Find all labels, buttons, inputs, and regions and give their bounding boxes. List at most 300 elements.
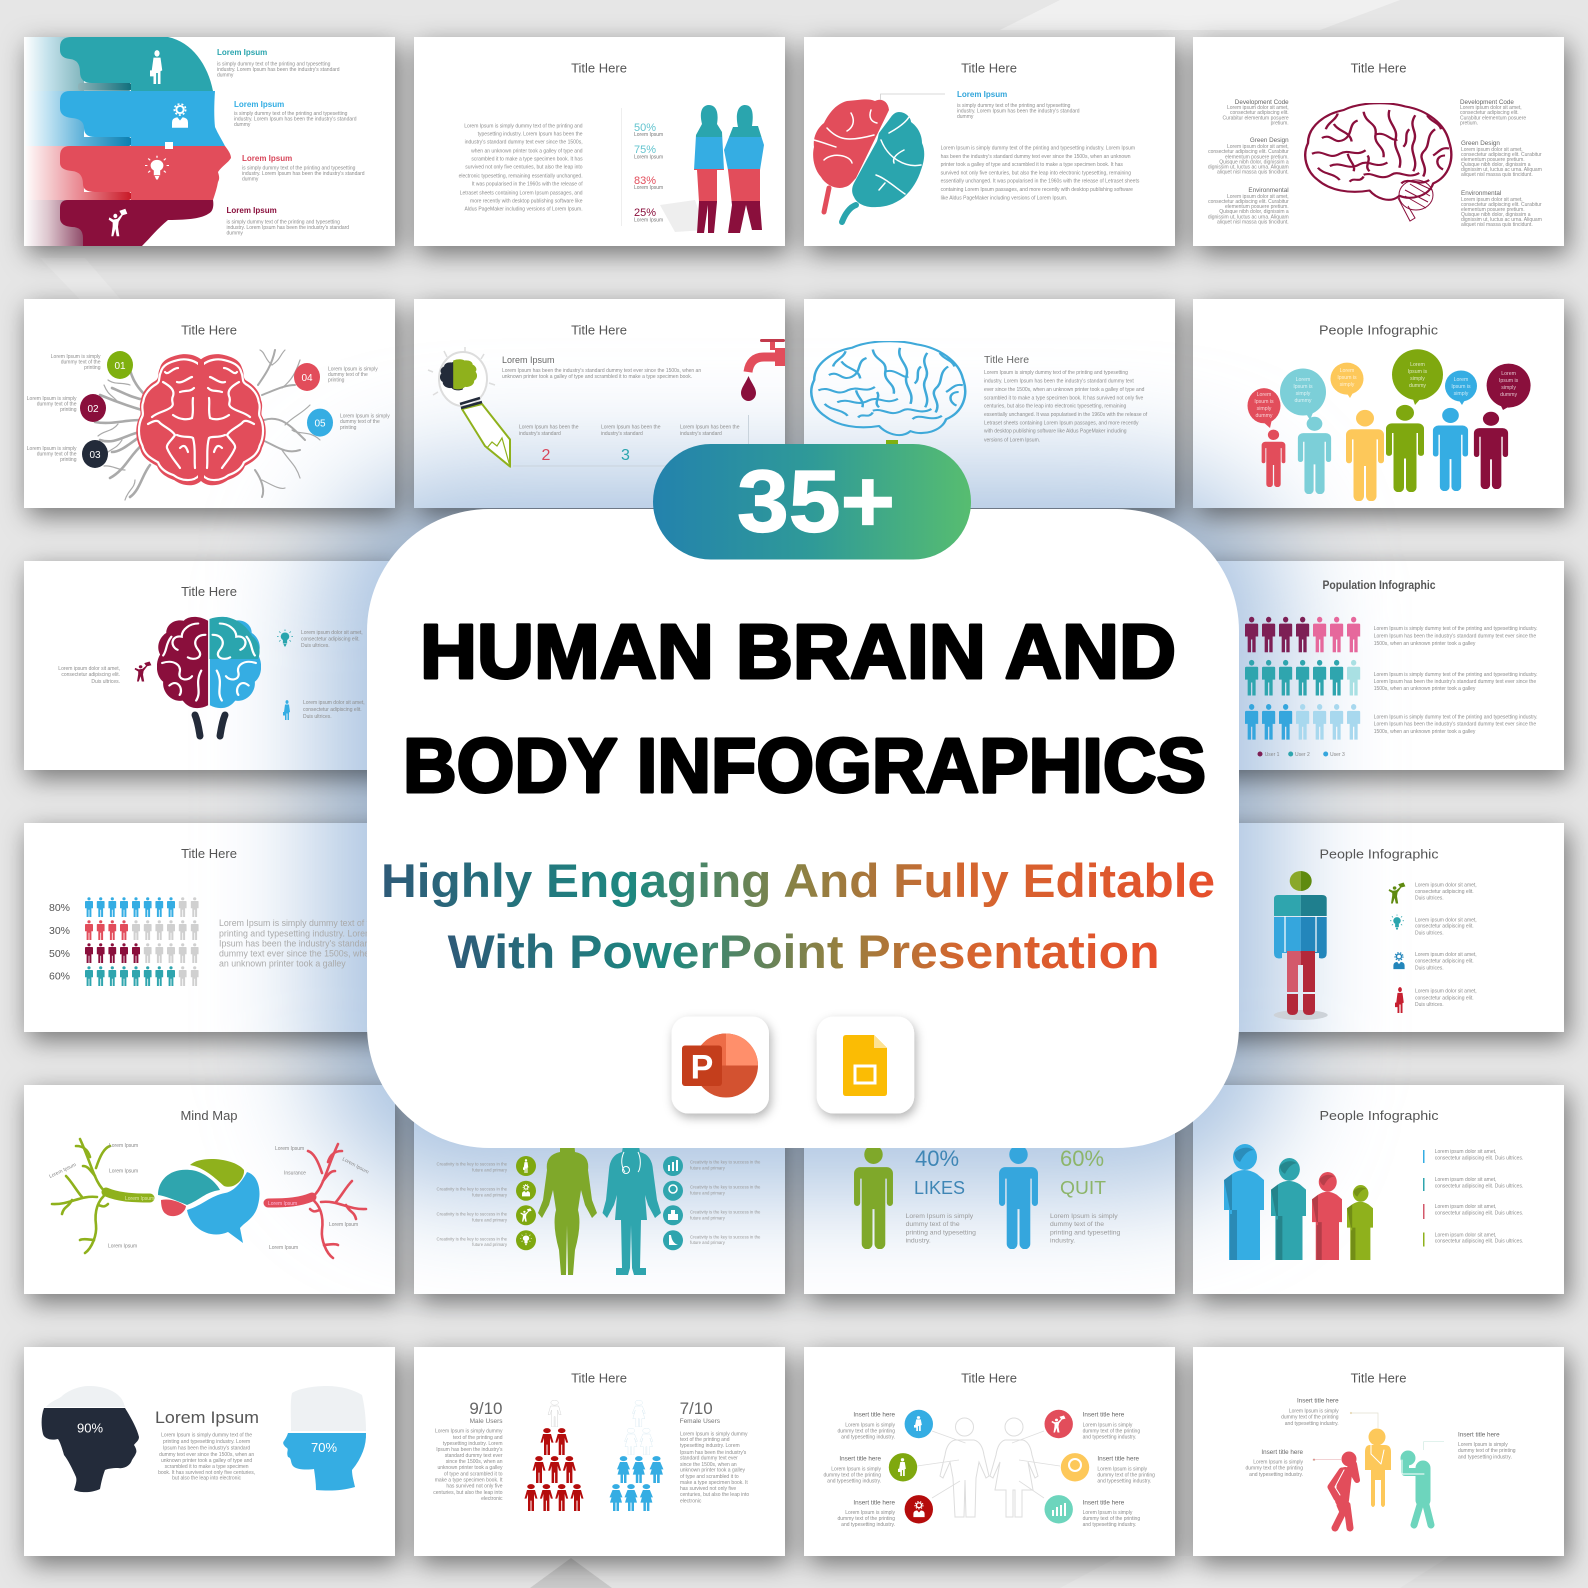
notes: Lorem Ipsum has been the industry's standard dummy text ever since the (1374, 679, 1536, 685)
pictogram grid (85, 897, 199, 986)
speech bubbles: dummy (1255, 413, 1273, 419)
title: Title Here (181, 322, 237, 338)
paragraph: industry's standard dummy text ever since the 1500s, (465, 140, 583, 146)
feature list: consectetur adipiscing elit. (1415, 924, 1474, 930)
paragraph: industry. Lorem Ipsum has been the industry's standard dummy text (984, 379, 1134, 385)
right notes: Lorem ipsum dolor sit amet, (301, 630, 363, 636)
brain outline (1305, 103, 1451, 221)
left labels: and typesetting industry. (841, 1522, 895, 1528)
feature list: Lorem ipsum dolor sit amet, (1415, 989, 1477, 995)
label texts: industry. Lorem Ipsum has been the industry's standard (226, 225, 349, 231)
label texts: Lorem Ipsum (217, 48, 267, 57)
notes: Lorem Ipsum is simply (1050, 1213, 1118, 1220)
labels: dummy text of the printing (1458, 1448, 1516, 1454)
icon: PowerPoint (672, 1016, 769, 1114)
paragraph: Lorem Ipsum is simply dummy text of the printing and typesetting (984, 370, 1128, 376)
feature list: Duis ultrices. (1415, 930, 1444, 936)
legend: User 2 (1295, 752, 1310, 758)
subtitle (381, 854, 1215, 978)
labels (27, 354, 390, 463)
columns: industry's standard (601, 431, 643, 437)
notes: printing and typesetting (906, 1230, 976, 1236)
speech bubbles: simply (1296, 391, 1311, 397)
stats: Lorem Ipsum (634, 132, 663, 138)
stat: likes: 40% (915, 1146, 959, 1171)
list: Lorem ipsum dolor sit amet, (1435, 1232, 1496, 1238)
stats: 50% (634, 122, 656, 134)
centre text: dummy text ever since the 1500s, when an (159, 1452, 254, 1458)
female text: unknown printer took a galley (680, 1468, 746, 1474)
paragraph: essentially unchanged. It was popularised in the 1960s with the release of (984, 412, 1148, 418)
branch labels: Lorem Ipsum (109, 1168, 138, 1174)
count pill (653, 444, 971, 560)
left note (58, 662, 151, 685)
right notes: future and primary (690, 1240, 726, 1245)
brain (158, 1159, 260, 1243)
branch labels: Lorem Ipsum (109, 1143, 138, 1149)
notes: 1500s, when an unknown printer took a galley (1374, 729, 1476, 735)
male text: standard dummy text ever (445, 1453, 503, 1459)
legend: User 3 (1330, 752, 1345, 758)
labels: dummy text of the (37, 451, 77, 457)
notes: Lorem Ipsum is simply dummy text of the printing and typesetting industry. (1374, 672, 1538, 678)
columns: Lorem Ipsum has been the (601, 424, 661, 430)
stat: quit: QUIT (1060, 1178, 1106, 1198)
stat: quit (1060, 1146, 1106, 1198)
slide: population infographic (1193, 561, 1564, 770)
list: consectetur adipiscing elit. Duis ultrices. (1435, 1184, 1523, 1190)
paragraph: Lorem Ipsum is simply dummy text of the (219, 918, 379, 928)
numbered circles: 04 (301, 373, 313, 384)
notes: industry. (1050, 1238, 1075, 1244)
labels: printing (84, 365, 101, 371)
callout text: dummy (957, 114, 974, 120)
labels: and typesetting industry. (1249, 1472, 1303, 1478)
labels: Insert title here (1261, 1449, 1303, 1456)
paragraph: has been the industry's standard dummy text ever since the 1500s, when an unknown (941, 154, 1131, 160)
left labels: Lorem Ipsum is simply (845, 1422, 895, 1428)
title: Title Here (181, 584, 237, 599)
label texts: is simply dummy text of the printing and typesetting (217, 62, 331, 68)
figures (1331, 1428, 1431, 1528)
speech bubbles: dummy (1409, 383, 1426, 389)
speech bubbles: simply (1501, 385, 1516, 391)
head band: red (60, 146, 231, 200)
label texts: industry. Lorem Ipsum has been the industry's standard (234, 116, 357, 122)
speech bubbles: Ipsum is (1408, 369, 1428, 375)
paragraph: more recently with desktop publishing software like (470, 198, 583, 204)
slide: split brain top view (24, 561, 395, 770)
title: Title Here (961, 1370, 1017, 1386)
right notes: dignissim ut, luctus ac urna. Aliquam (1461, 167, 1542, 173)
numbered circles: 02 (87, 404, 99, 415)
intro text (502, 355, 701, 380)
label texts: dummy (226, 230, 243, 236)
label texts: Lorem Ipsum (226, 206, 277, 215)
labels: printing (60, 407, 77, 413)
centre text: unknown printer took a galley of type and (161, 1458, 252, 1464)
branch labels: Lorem Ipsum (268, 1201, 297, 1207)
icon: PowerPoint: P (691, 1048, 713, 1086)
speech bubbles: simply (1340, 382, 1355, 388)
callout text: Lorem Ipsum (957, 90, 1007, 99)
left notes: Quisque nibh dolor, dignissim a (1219, 160, 1289, 166)
right notes: Lorem ipsum dolor sit amet, (1461, 197, 1523, 203)
branch labels (48, 1143, 370, 1251)
right notes: elementum posuere pretium. (1461, 207, 1525, 213)
female text: Ipsum has been the industry's (680, 1450, 747, 1456)
feature list: Duis ultrices. (1415, 1002, 1444, 1008)
title: Title Here (1351, 1370, 1406, 1386)
stat: quit: 60% (1060, 1146, 1104, 1171)
feature list: Duis ultrices. (1415, 965, 1444, 971)
left notes: Creativity is the key to success in the (437, 1186, 508, 1192)
subtitle: With PowerPoint Presentation (448, 925, 1160, 978)
branch labels: Lorem Ipsum (341, 1156, 370, 1175)
labels: dummy text of the printing (1281, 1414, 1339, 1420)
right labels: Insert title here (1083, 1499, 1125, 1506)
slide: brain with roots (24, 299, 395, 508)
right notes: future and primary (690, 1190, 726, 1196)
slide: blue outline brain (804, 299, 1175, 508)
speech bubbles: dummy (1294, 398, 1312, 404)
feature list: Lorem ipsum dolor sit amet, (1415, 952, 1477, 958)
body silhouettes (538, 1140, 661, 1275)
title: People Infographic (1320, 846, 1439, 862)
centre text: book. It has survived not only five centuries, (158, 1470, 255, 1476)
title: People Infographic (1320, 1108, 1439, 1123)
right notes: elementum posuere pretium. (1461, 157, 1525, 163)
female text: centuries, but also the leap into (680, 1492, 749, 1498)
male text: unknown printer took a galley (437, 1465, 503, 1471)
labels (1245, 1398, 1516, 1478)
list: Lorem ipsum dolor sit amet, (1435, 1177, 1496, 1183)
paragraph: when an unknown printer took a galley of type and (471, 148, 583, 154)
brain (813, 99, 924, 222)
left notes: future and primary (472, 1168, 508, 1172)
left labels: dummy text of the printing (837, 1516, 895, 1522)
right notes: consectetur adipiscing elit. (303, 707, 362, 713)
left labels: Insert title here (839, 1456, 881, 1463)
notes: dummy text of the (906, 1221, 960, 1228)
notes: industry. (906, 1238, 931, 1244)
right notes: Creativity is the key to success in the (690, 1234, 761, 1240)
female text: Female Users (680, 1418, 721, 1425)
left notes: Lorem ipsum dolor sit amet, (1227, 144, 1289, 150)
right labels: Lorem Ipsum is simply (1083, 1510, 1133, 1516)
left notes: consectetur adipiscing elit. Curabitur (1208, 199, 1289, 205)
paragraph: with desktop publishing software like Aldus PageMaker including (984, 429, 1127, 435)
numbered circles: 05 (314, 419, 326, 430)
male text: of type and scrambled it to (444, 1472, 503, 1478)
left notes: Creativity is the key to success in the (437, 1162, 508, 1166)
paragraph: Lorem Ipsum is simply dummy text of the printing and typesetting industry. Lorem Ipsum (941, 146, 1135, 152)
labels: Lorem Ipsum is simply (328, 366, 378, 372)
list: Lorem ipsum dolor sit amet, (1435, 1204, 1496, 1210)
speech bubbles (1248, 349, 1531, 428)
3D figures (1224, 1144, 1373, 1260)
paragraph: centuries, but also the leap into electronic typesetting, remaining (984, 404, 1127, 410)
stats: Lorem Ipsum (634, 185, 663, 191)
paragraph: Lorem Ipsum is simply dummy text of the printing and (464, 124, 583, 130)
title: Title Here (1351, 60, 1406, 76)
bulb and pencil (428, 347, 510, 466)
pictograms (1245, 617, 1360, 740)
count pill: 35+ (737, 452, 895, 550)
columns: 3 (621, 447, 630, 464)
percent labels: 60% (49, 971, 70, 983)
feature list: consectetur adipiscing elit. (1415, 995, 1474, 1001)
left notes: Creativity is the key to success in the (437, 1236, 508, 1242)
centre text: Lorem Ipsum (155, 1408, 259, 1427)
right labels (1083, 1412, 1155, 1528)
slide: male and female users (414, 1347, 785, 1556)
notes (906, 1213, 1121, 1244)
columns: 2 (542, 447, 551, 464)
speech bubbles: Lorem (1501, 371, 1516, 377)
right notes: aliquet nisl massa quis tincidunt. (1461, 222, 1533, 228)
right labels: dummy text of the printing (1097, 1472, 1155, 1478)
labels: dummy text of the (328, 372, 368, 378)
labels: printing (60, 457, 77, 463)
left notes (437, 1162, 508, 1247)
stats: 25% (634, 207, 656, 219)
left notes: consectetur adipiscing elit. (1230, 110, 1289, 116)
male text: electronic (481, 1496, 503, 1502)
feature list: Lorem ipsum dolor sit amet, (1415, 917, 1477, 923)
male pyramid (524, 1400, 584, 1511)
speech bubbles: Lorem (1296, 377, 1310, 383)
labels: Insert title here (1458, 1431, 1500, 1438)
branch labels: Lorem Ipsum (329, 1222, 358, 1228)
icon: Google Slides (817, 1016, 914, 1114)
slide: outline bodies with callouts (804, 1347, 1175, 1556)
right notes (690, 1160, 761, 1245)
notes: Lorem Ipsum is simply (906, 1213, 974, 1220)
tap and drop (741, 339, 785, 401)
female text: of type and scrambled it to (680, 1474, 739, 1480)
speech bubbles: dummy (1500, 392, 1518, 398)
label texts: industry. Lorem Ipsum has been the industry's standard (242, 171, 365, 177)
right notes (1460, 99, 1542, 228)
speech bubbles: Ipsum is (1254, 399, 1274, 405)
central panel (367, 444, 1239, 1148)
title: Mind Map (180, 1108, 238, 1123)
notes (1374, 626, 1538, 735)
right notes: Creativity is the key to success in the (690, 1160, 761, 1164)
columns: Lorem Ipsum has been the (680, 424, 740, 430)
left labels (823, 1412, 895, 1528)
percent labels (49, 902, 70, 983)
columns (513, 415, 748, 466)
slide: head percentages (24, 1347, 395, 1556)
male text: Lorem Ipsum is simply dummy (435, 1428, 503, 1434)
right notes: Duis ultrices. (303, 714, 332, 720)
right notes: Green Design (1461, 140, 1500, 147)
right notes: future and primary (690, 1166, 726, 1170)
female text (680, 1399, 749, 1504)
label texts: is simply dummy text of the printing and typesetting (242, 166, 356, 172)
label texts: Lorem Ipsum (242, 154, 292, 163)
speech bubbles: Lorem (1410, 362, 1425, 368)
right notes: consectetur adipiscing elit. (301, 636, 360, 642)
leader lines (1313, 1412, 1444, 1461)
notes: Lorem Ipsum is simply dummy text of the printing and typesetting industry. (1374, 714, 1538, 720)
right head 70% (283, 1386, 366, 1491)
left labels: and typesetting industry. (841, 1434, 895, 1440)
right notes: consectetur adipiscing elit. Curabitur (1461, 202, 1542, 208)
right notes: aliquet nisl massa quis tincidunt. (1461, 172, 1533, 178)
label texts: Lorem Ipsum (234, 100, 284, 109)
slide: green and teal bodies (414, 1085, 785, 1294)
notes: printing and typesetting (1050, 1230, 1121, 1236)
left labels: dummy text of the printing (823, 1472, 881, 1478)
slide: business couple stats (414, 37, 785, 246)
right labels: Insert title here (1097, 1456, 1140, 1463)
right labels: dummy text of the printing (1083, 1428, 1140, 1434)
connector (881, 94, 945, 100)
labels: printing (328, 378, 345, 384)
label texts: industry. Lorem Ipsum has been the industry's standard (217, 67, 340, 73)
notes: Lorem Ipsum has been the industry's standard dummy text ever since the (1374, 634, 1536, 640)
right labels: dummy text of the printing (1083, 1516, 1140, 1522)
right notes: Environmental (1461, 190, 1501, 197)
female text: electronic (680, 1498, 702, 1504)
left labels: dummy text of the printing (837, 1428, 895, 1434)
left labels: Lorem Ipsum is simply (845, 1510, 895, 1516)
feature list (1389, 882, 1477, 1013)
male text: typesetting industry. Lorem (443, 1441, 502, 1447)
male text: text of the printing and (453, 1435, 503, 1441)
connectors (917, 1431, 1060, 1498)
speech bubbles: simply (1410, 376, 1425, 382)
paragraph: It was popularised in the 1960s with the release of (472, 182, 583, 188)
labels: dummy text of the (37, 401, 77, 407)
paragraph: versions of Lorem Ipsum. (984, 438, 1040, 444)
right labels: Lorem Ipsum is simply (1083, 1422, 1133, 1428)
head band: maroon (60, 200, 213, 246)
numbered circles (80, 351, 333, 468)
labels: Lorem Ipsum is simply (51, 354, 101, 360)
slide: bulb pencil and tap (414, 299, 785, 508)
branch labels: Lorem Ipsum (48, 1162, 77, 1180)
segmented figure (1274, 871, 1328, 1020)
branch labels: Lorem Ipsum (269, 1245, 298, 1251)
right labels: and typesetting industry. (1083, 1434, 1136, 1440)
slide: people infographic figure (1193, 823, 1564, 1032)
feature list: Lorem ipsum dolor sit amet, (1415, 882, 1477, 888)
slide: likes and quit (804, 1085, 1175, 1294)
left notes: Curabitur elementum posuere (1223, 116, 1289, 122)
label texts: dummy (217, 72, 234, 78)
labels: Lorem Ipsum is simply (340, 414, 390, 420)
green branch tree (52, 1139, 150, 1253)
left notes: consectetur adipiscing elit. Curabitur (1208, 149, 1289, 155)
female text: standard dummy text ever (680, 1456, 738, 1462)
numbered circles: 01 (114, 361, 126, 372)
numbered circles: 03 (89, 450, 101, 461)
speech bubbles: Lorem (1454, 377, 1468, 383)
label texts (217, 48, 365, 236)
right labels: and typesetting industry. (1083, 1522, 1136, 1528)
speech bubbles: Ipsum is (1337, 375, 1357, 381)
left notes: Creativity is the key to success in the (437, 1212, 508, 1216)
columns: industry's standard (519, 431, 561, 437)
right notes: Quisque nibh dolor, dignissim a (1461, 212, 1531, 218)
paragraph: survived not only five centuries, but also the leap into electronic typesetting, remaining (941, 170, 1131, 176)
left note: Duis ultrices. (91, 679, 120, 685)
callout text: is simply dummy text of the printing and typesetting (957, 103, 1071, 109)
male text: make a type specimen book. It (435, 1478, 503, 1484)
labels: Insert title here (1297, 1398, 1339, 1405)
female text: since the 1500s, when an (680, 1462, 737, 1468)
paragraph: essentially unchanged. It was popularised in the 1960s with the release of Letraset sheets (941, 178, 1140, 184)
main title: BODY INFOGRAPHICS (403, 723, 1206, 809)
notes: 1500s, when an unknown printer took a galley (1374, 686, 1476, 692)
notes: Lorem Ipsum has been the industry's standard dummy text ever since the (1374, 722, 1536, 728)
male text (433, 1399, 503, 1502)
head band: teal (60, 37, 213, 91)
label texts: is simply dummy text of the printing and typesetting (234, 111, 348, 117)
female text: has survived not only five (680, 1486, 736, 1492)
notes: dummy text of the (1050, 1221, 1104, 1228)
speech bubbles: Lorem (1257, 392, 1271, 398)
silhouettes (660, 105, 764, 233)
slide: layered head (24, 37, 395, 246)
female text: make a type specimen book. It (680, 1480, 748, 1486)
centre text: Ipsum has been the industry's standard (163, 1446, 250, 1452)
right labels: and typesetting industry. (1097, 1478, 1151, 1484)
stats: Lorem Ipsum (634, 154, 663, 160)
labels: Lorem Ipsum is simply (27, 446, 77, 452)
left notes: future and primary (472, 1218, 508, 1222)
title: Population Infographic (1322, 580, 1436, 592)
left notes: Lorem ipsum dolor sit amet, (1227, 105, 1289, 111)
paragraph: Ipsum has been the industry's standard (219, 939, 372, 949)
right notes: Quisque nibh dolor, dignissim a (1461, 162, 1531, 168)
left notes: Development Code (1235, 99, 1289, 106)
male text: 9/10 (469, 1399, 502, 1418)
female text: 7/10 (680, 1399, 713, 1418)
branch labels: Lorem Ipsum (275, 1146, 304, 1152)
left head 90% (42, 1386, 139, 1492)
stat: likes (914, 1146, 965, 1198)
title: Title Here (571, 60, 627, 76)
slide: gesturing figures (1193, 1347, 1564, 1556)
paragraph: scrambled it to make a type specimen book. It has survived not only five (984, 396, 1143, 402)
title: Title Here (571, 322, 627, 338)
left notes: aliquet nisl massa quis tincidunt. (1217, 220, 1289, 226)
female text: text of the printing and (680, 1437, 730, 1443)
paragraph: printing and typesetting industry. Lorem (219, 928, 372, 938)
brain (157, 617, 261, 736)
labels: dummy text of the (61, 359, 101, 365)
speech bubbles: simply (1257, 406, 1272, 412)
feature list: Duis ultrices. (1415, 896, 1444, 902)
labels: and typesetting industry. (1285, 1421, 1339, 1427)
left notes: elementum posuere pretium. (1225, 204, 1289, 210)
labels: Lorem Ipsum is simply (1289, 1408, 1339, 1414)
left notes: Quisque nibh dolor, dignissim a (1219, 209, 1289, 215)
stats: 83% (634, 175, 656, 187)
left labels: Lorem Ipsum is simply (831, 1466, 881, 1472)
paragraph: Aldus PageMaker including versions of Lorem Ipsum. (464, 206, 583, 212)
left notes: Green Design (1250, 137, 1289, 144)
paragraph: ever since the 1500s, when an unknown printer took a galley of type and (984, 387, 1145, 393)
male text: since the 1500s, when an (446, 1459, 503, 1465)
feature list: consectetur adipiscing elit. (1415, 889, 1474, 895)
speech bubbles: Ipsum is (1499, 378, 1519, 384)
